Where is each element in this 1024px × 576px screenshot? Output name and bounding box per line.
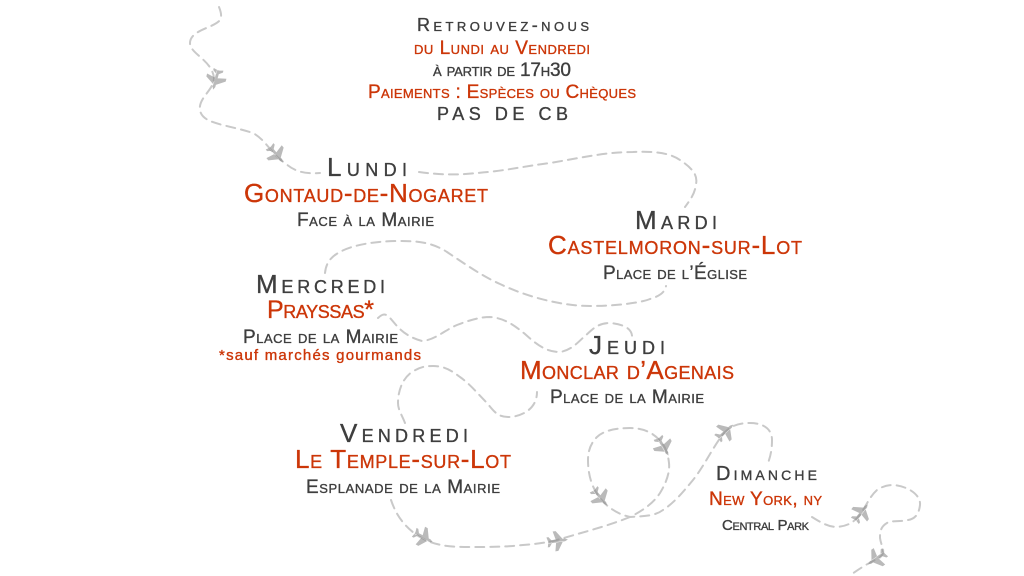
place: Esplanade de la Mairie: Esplanade de la Mairie — [306, 477, 500, 498]
place: Face à la Mairie: Face à la Mairie — [297, 210, 434, 231]
town: Monclar d'Agenais: Monclar d’Agenais — [520, 355, 734, 385]
stop: Jeudi — [520, 330, 734, 408]
text: payment means: Paiements : Espèces ou Chèques — [368, 82, 636, 103]
town: Le Temple-sur-Lot: Le Temple-sur-Lot — [295, 444, 511, 474]
place: Place de la Mairie: Place de la Mairie — [550, 387, 704, 408]
icon: plane 8 — [847, 498, 876, 527]
route: departure from Dimanche — [812, 485, 920, 574]
route: Lundi to Mardi — [419, 152, 696, 207]
town: Gontaud-de-Nogaret: Gontaud-de-Nogaret — [244, 178, 488, 208]
route: Vendredi to Dimanche with loop — [391, 423, 772, 547]
town: New York, NY: New York, ny — [709, 489, 822, 510]
heading line: Retrouvez-nous: Retrouvez-nous — [417, 15, 589, 35]
day: Mercredi: Mercredi — [256, 269, 385, 299]
town: Prayssas: Prayssas* — [267, 296, 374, 324]
day: Lundi: Lundi — [327, 152, 407, 182]
day: Dimanche: Dimanche — [716, 463, 817, 485]
day: Mardi: Mardi — [635, 205, 717, 235]
route: flight path to Lundi — [190, 7, 320, 173]
place: Place de l'Église: Place de l’Église — [603, 263, 747, 284]
icon: plane 5 — [649, 432, 677, 461]
place: Place de la Mairie: Place de la Mairie — [243, 327, 398, 348]
text: opening time: à partir de 17h30 — [433, 60, 571, 81]
icon: plane 9 — [862, 544, 891, 573]
route: Jeudi to Vendredi — [398, 366, 537, 423]
stop: Mardi — [548, 205, 802, 284]
icon: plane 1 — [203, 67, 228, 92]
place: Central Park: Central Park — [722, 517, 810, 534]
route: Mercredi to Jeudi — [378, 315, 632, 352]
stop: Mercredi — [219, 269, 421, 364]
icon: plane 4 — [546, 530, 569, 552]
icon: plane 2 — [262, 140, 291, 169]
text: no card: PAS DE CB — [437, 104, 568, 124]
day: Vendredi: Vendredi — [340, 418, 468, 448]
stop: Dimanche — [709, 463, 822, 534]
stop: Vendredi — [295, 418, 511, 498]
day: Jeudi: Jeudi — [589, 330, 665, 360]
route: Mardi to Mercredi — [325, 241, 666, 306]
stop: Lundi — [244, 152, 488, 231]
text: days: du Lundi au Vendredi — [414, 38, 590, 59]
icon: plane 7 — [711, 417, 740, 446]
icon: plane 3 — [409, 523, 437, 551]
heading block: schedule and payment — [368, 15, 636, 124]
town: Castelmoron-sur-Lot: Castelmoron-sur-Lot — [548, 230, 802, 260]
icon: plane 6 — [586, 483, 615, 512]
note: sauf marchés gourmands: *sauf marchés gourmands — [219, 347, 421, 364]
